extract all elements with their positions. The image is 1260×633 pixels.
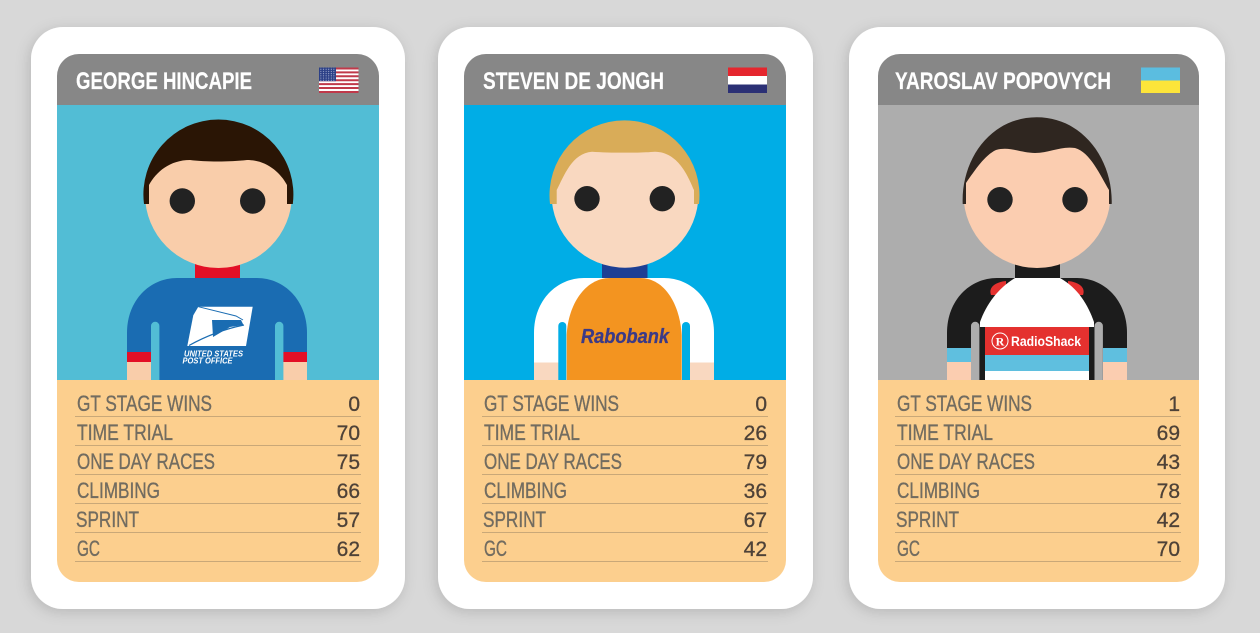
stats table: 69: [1157, 422, 1180, 445]
card frame: [438, 27, 813, 609]
eyes: [170, 188, 265, 214]
blue jersey band: [985, 355, 1089, 371]
stats table: GT STAGE WINS: [897, 391, 1032, 416]
neck: [195, 255, 240, 281]
jersey side stripes: [980, 327, 1094, 380]
rider name: STEVEN DE JONGH: [483, 68, 664, 95]
stats table: 79: [744, 451, 767, 474]
rider illustration: [127, 120, 307, 380]
stats table: GT STAGE WINS: [484, 391, 619, 416]
stats table: SPRINT: [76, 507, 139, 532]
eyes: [987, 187, 1088, 212]
rider name: GEORGE HINCAPIE: [76, 68, 252, 95]
name header: [464, 54, 786, 582]
neck: [602, 255, 648, 281]
eyes: [574, 186, 675, 211]
rider illustration: [947, 117, 1127, 380]
jersey sleeves: [534, 278, 714, 380]
stats table: ONE DAY RACES: [897, 449, 1035, 474]
arm gaps: [151, 322, 283, 380]
card: George Hincapie: [31, 27, 405, 609]
rider name: YAROSLAV POPOVYCH: [895, 68, 1111, 95]
face: [964, 121, 1110, 268]
jersey: [127, 278, 307, 380]
stats table: 75: [337, 451, 360, 474]
arm gaps: [558, 322, 690, 380]
face: [145, 121, 292, 268]
stats table: TIME TRIAL: [77, 420, 173, 445]
stats table: 1: [1168, 393, 1180, 416]
stats table: ONE DAY RACES: [484, 449, 622, 474]
stats table: GC: [897, 536, 920, 561]
red shoulder accents: [990, 281, 1084, 295]
card frame: [31, 27, 405, 609]
neck: [1015, 255, 1060, 281]
logo: RadioShack: [985, 327, 1089, 355]
stats table: 70: [337, 422, 360, 445]
stats table: 42: [1157, 509, 1180, 532]
cuffs and forearms: [947, 348, 1127, 380]
stats table: 26: [744, 422, 767, 445]
stats table: GC: [77, 536, 100, 561]
stats table: 36: [744, 480, 767, 503]
orange jersey panel: [567, 278, 682, 380]
stats table: 57: [337, 509, 360, 532]
face: [552, 121, 698, 268]
stats table: [75, 391, 361, 562]
card frame: [849, 27, 1225, 609]
name header: [57, 54, 379, 582]
hair: [550, 120, 700, 204]
stats table: TIME TRIAL: [484, 420, 580, 445]
name header: [878, 54, 1199, 582]
stats table: GT STAGE WINS: [77, 391, 212, 416]
stats table: 70: [1157, 538, 1180, 561]
left cuff and forearm: [127, 352, 151, 380]
logo: United States Post Office: UNITED STATES: [184, 348, 243, 358]
hair: [143, 120, 293, 204]
stats table: [482, 391, 768, 562]
stats table: 67: [744, 509, 767, 532]
stats table: 43: [1157, 451, 1180, 474]
stats table: 42: [744, 538, 767, 561]
arm gaps: [971, 322, 1103, 380]
stats table: TIME TRIAL: [897, 420, 993, 445]
white jersey panel: [980, 278, 1094, 380]
card: Steven de Jongh: [438, 27, 813, 609]
right cuff and forearm: [283, 352, 307, 380]
stats table: 62: [337, 538, 360, 561]
stats table: CLIMBING: [897, 478, 980, 503]
logo: United States Post Office: POST OFFICE: [182, 356, 233, 366]
stats table: ONE DAY RACES: [77, 449, 215, 474]
stats table: [895, 391, 1181, 562]
icon: Ukraine flag: [1141, 68, 1180, 93]
stats table: SPRINT: [483, 507, 546, 532]
logo: RadioShack: R: [996, 334, 1005, 348]
stats table: 0: [348, 393, 360, 416]
stats table: 78: [1157, 480, 1180, 503]
stats table: GC: [484, 536, 507, 561]
stats table: 0: [755, 393, 767, 416]
logo: RadioShack: RadioShack: [1011, 334, 1081, 349]
forearms: [534, 362, 714, 380]
stats table: CLIMBING: [484, 478, 567, 503]
logo: Rabobank: Rabobank: [581, 325, 670, 348]
rider illustration: [534, 120, 714, 380]
stats table: 66: [337, 480, 360, 503]
hair: [963, 117, 1112, 204]
jersey sleeves: [947, 278, 1127, 380]
icon: USA flag: [319, 68, 358, 93]
logo: United States Post Office: [182, 307, 253, 366]
card: Yaroslav Popovych: [849, 27, 1225, 609]
stats table: CLIMBING: [77, 478, 160, 503]
icon: Netherlands flag: [728, 68, 767, 93]
stats table: SPRINT: [896, 507, 959, 532]
